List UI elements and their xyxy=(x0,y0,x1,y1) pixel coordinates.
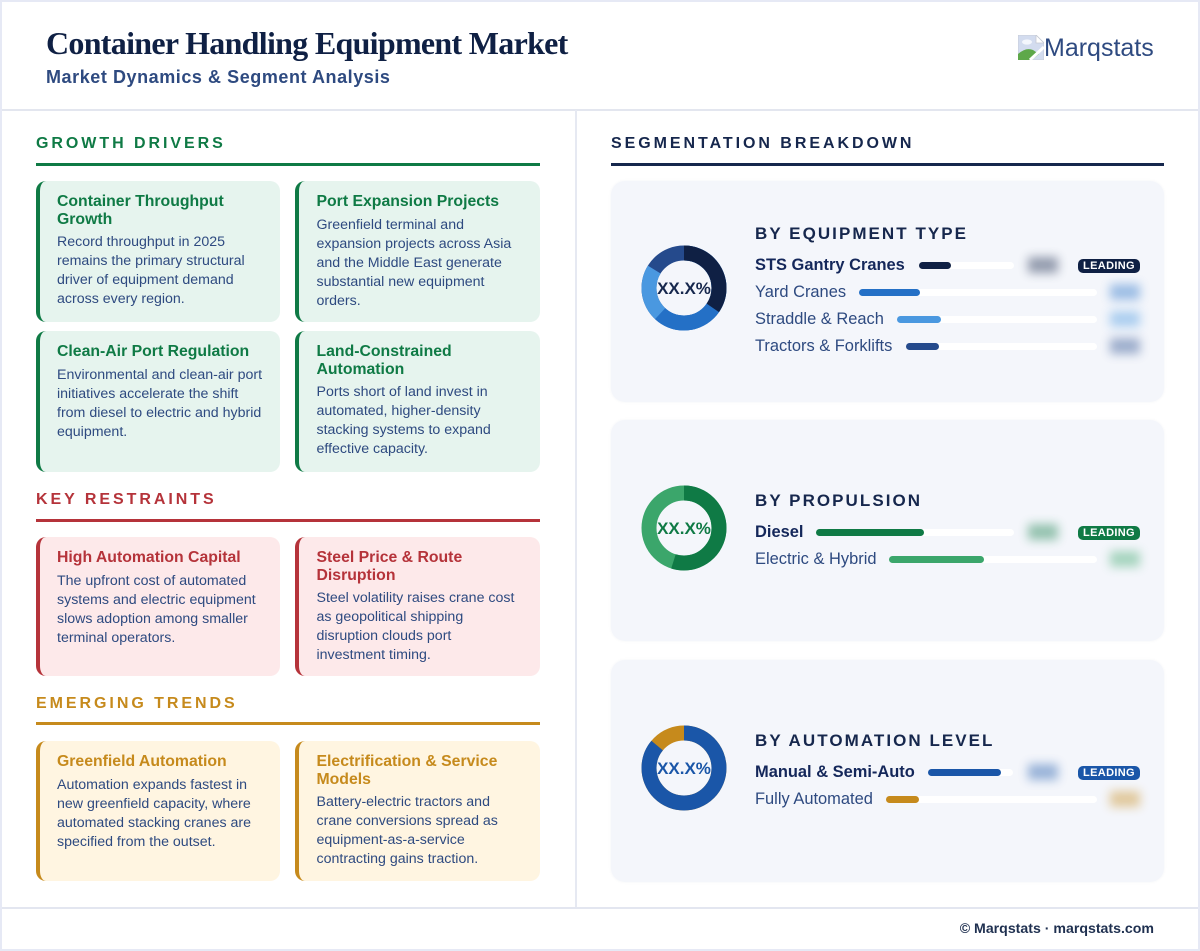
row: STS gantry cranes xyxy=(755,250,1140,280)
card: container throughput growth: across every region. xyxy=(57,291,185,307)
row: STS gantry cranes: XX% xyxy=(1028,257,1057,272)
card: container throughput growth: Container Throughput xyxy=(57,193,224,210)
heading: growth drivers: GROWTH DRIVERS xyxy=(36,135,226,152)
row: manual and semi-auto: Manual & Semi-Auto xyxy=(755,763,915,781)
card: high automation capital: systems and electric equipment xyxy=(57,592,256,608)
title: Container Handling Equipment Market xyxy=(46,25,568,61)
row: tractors and forklifts: Tractors & Forklifts xyxy=(755,337,892,355)
card: land-constrained automation: Land-Constrained xyxy=(316,343,452,360)
row: manual and semi-auto xyxy=(755,758,1140,786)
donut: automation level: XX.X% xyxy=(657,759,711,778)
panel: by automation level xyxy=(611,660,1164,882)
row: straddle and reach: XX% xyxy=(1110,311,1139,326)
card: steel price and route disruption: as geopolitical shipping xyxy=(316,609,463,625)
row: straddle and reach xyxy=(755,306,1146,332)
heading: segmentation breakdown: SEGMENTATION BREAKDOWN xyxy=(611,135,914,152)
card: port expansion projects: and the Middle East generate xyxy=(316,255,502,271)
donut: equipment type: XX.X% xyxy=(657,279,711,298)
row: yard cranes: XX% xyxy=(1110,284,1139,299)
card: container throughput growth: Record throughput in 2025 xyxy=(57,234,225,250)
row: yard cranes xyxy=(755,278,1146,306)
card: land-constrained automation: Automation xyxy=(316,361,404,378)
card: steel price and route disruption: Disruption xyxy=(316,567,395,584)
card: high automation capital: The upfront cost of automated xyxy=(57,573,246,589)
card: port expansion projects: substantial new equipment xyxy=(316,274,484,290)
card: steel price and route disruption xyxy=(295,537,540,676)
row: straddle and reach: Straddle & Reach xyxy=(755,310,884,328)
column divider xyxy=(575,110,576,907)
row: STS gantry cranes: STS Gantry Cranes xyxy=(755,256,905,274)
card: land-constrained automation: automated, higher-density xyxy=(316,403,481,419)
card: greenfield automation: Greenfield Automation xyxy=(57,753,227,770)
footer credit: © Marqstats · marqstats.com xyxy=(960,920,1154,936)
header divider xyxy=(2,109,1198,110)
row: diesel xyxy=(755,518,1140,546)
card: electrification and service models: equipment-as-a-service xyxy=(316,832,465,848)
logo: broken image placeholder with Marqstats text xyxy=(1018,34,1154,62)
row: STS gantry cranes: LEADING xyxy=(1083,260,1135,272)
panel title: BY PROPULSION xyxy=(755,491,922,510)
card: port expansion projects: Port Expansion Projects xyxy=(316,193,499,210)
card: electrification and service models: Battery-electric tractors and xyxy=(316,794,490,810)
card: high automation capital xyxy=(36,537,280,676)
row: diesel: Diesel xyxy=(755,523,803,541)
row: tractors and forklifts: XX% xyxy=(1110,338,1139,353)
card: container throughput growth: Growth xyxy=(57,211,112,228)
donut: equipment type xyxy=(642,246,726,330)
card: container throughput growth: remains the primary structural xyxy=(57,253,245,269)
card: electrification and service models xyxy=(295,741,540,881)
donut: propulsion: XX.X% xyxy=(657,519,711,538)
row: electric and hybrid: XX% xyxy=(1110,551,1139,566)
card: clean-air port regulation: from diesel to electric and hybrid xyxy=(57,405,261,421)
row: manual and semi-auto: LEADING xyxy=(1083,766,1135,778)
row: yard cranes: Yard Cranes xyxy=(755,283,846,301)
card: clean-air port regulation xyxy=(36,331,280,472)
card: steel price and route disruption: disruption clouds port xyxy=(316,628,451,644)
row: electric and hybrid xyxy=(755,545,1146,573)
card: container throughput growth xyxy=(36,181,280,322)
row: diesel: LEADING xyxy=(1083,526,1135,538)
row: fully automated: XX% xyxy=(1110,791,1139,806)
row: tractors and forklifts xyxy=(755,332,1146,360)
panel title: BY AUTOMATION LEVEL xyxy=(755,731,994,750)
card: greenfield automation xyxy=(36,741,280,881)
card: port expansion projects: orders. xyxy=(316,293,361,309)
card: clean-air port regulation: Environmental and clean-air port xyxy=(57,367,262,383)
card: greenfield automation: Automation expands fastest in xyxy=(57,777,247,793)
panel: by propulsion xyxy=(611,420,1164,641)
card: land-constrained automation: effective capacity. xyxy=(316,441,428,457)
donut: automation level xyxy=(642,726,726,810)
card: port expansion projects: expansion projects across Asia xyxy=(316,236,511,252)
card: clean-air port regulation: initiatives accelerate the shift xyxy=(57,386,238,402)
row: electric and hybrid: Electric & Hybrid xyxy=(755,550,876,568)
heading: emerging trends: EMERGING TRENDS xyxy=(36,695,238,712)
card: port expansion projects: Greenfield terminal and xyxy=(316,217,464,233)
row: fully automated xyxy=(755,784,1146,814)
subtitle: Market Dynamics & Segment Analysis xyxy=(46,67,390,87)
card: electrification and service models: Models xyxy=(316,771,371,788)
card: land-constrained automation xyxy=(295,331,540,472)
card: electrification and service models: crane conversions spread as xyxy=(316,813,498,829)
footer divider xyxy=(2,907,1198,908)
card: electrification and service models: Electrification & Service xyxy=(316,753,497,770)
donut: propulsion xyxy=(642,486,726,570)
card: greenfield automation: specified from the outset. xyxy=(57,834,216,850)
card: high automation capital: slows adoption among smaller xyxy=(57,611,248,627)
card: land-constrained automation: stacking systems to expand xyxy=(316,422,491,438)
row: manual and semi-auto: XX% xyxy=(1028,764,1057,779)
panel title: BY EQUIPMENT TYPE xyxy=(755,224,968,243)
icon: broken image xyxy=(1018,35,1044,60)
card: steel price and route disruption: investment timing. xyxy=(316,647,431,663)
card: clean-air port regulation: equipment. xyxy=(57,424,127,440)
card: high automation capital: High Automation Capital xyxy=(57,549,241,566)
card: high automation capital: terminal operators. xyxy=(57,630,175,646)
row: diesel: XX% xyxy=(1028,524,1057,539)
card: clean-air port regulation: Clean-Air Port Regulation xyxy=(57,343,249,360)
row: fully automated: Fully Automated xyxy=(755,790,873,808)
heading: key restraints: KEY RESTRAINTS xyxy=(36,491,217,508)
card: port expansion projects xyxy=(295,181,540,322)
card: steel price and route disruption: Steel Price & Route xyxy=(316,549,462,566)
card: land-constrained automation: Ports short of land invest in xyxy=(316,384,488,400)
card: greenfield automation: automated stacking cranes are xyxy=(57,815,251,831)
panel: by equipment type xyxy=(611,181,1164,402)
logo text: Marqstats xyxy=(1044,34,1154,62)
card: electrification and service models: contracting gains traction. xyxy=(316,851,478,867)
card: container throughput growth: driver of equipment demand xyxy=(57,272,234,288)
card: greenfield automation: new greenfield capacity, where xyxy=(57,796,251,812)
card: steel price and route disruption: Steel volatility raises crane cost xyxy=(316,590,514,606)
